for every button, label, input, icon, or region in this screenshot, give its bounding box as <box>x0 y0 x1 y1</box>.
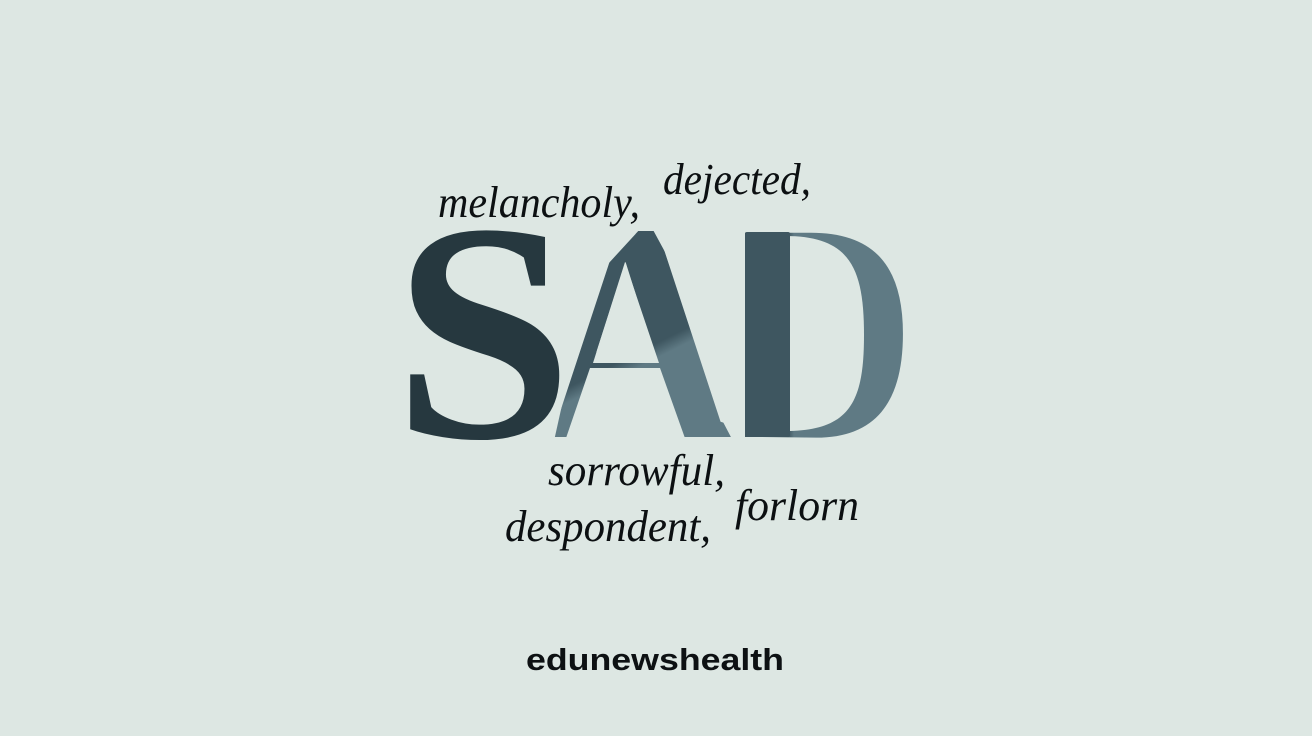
word: despondent: despondent, <box>505 502 711 551</box>
letter A: A <box>541 160 736 505</box>
letter D: D <box>723 160 916 505</box>
word: dejected: dejected, <box>663 155 811 204</box>
word: melancholy: melancholy, <box>438 178 640 227</box>
letter S: S <box>393 160 573 505</box>
word: forlorn: forlorn <box>735 481 859 530</box>
brand: edunewshealth: edunewshealth <box>526 642 784 677</box>
word: sorrowful: sorrowful, <box>548 446 725 495</box>
title: SAD <box>393 160 916 505</box>
